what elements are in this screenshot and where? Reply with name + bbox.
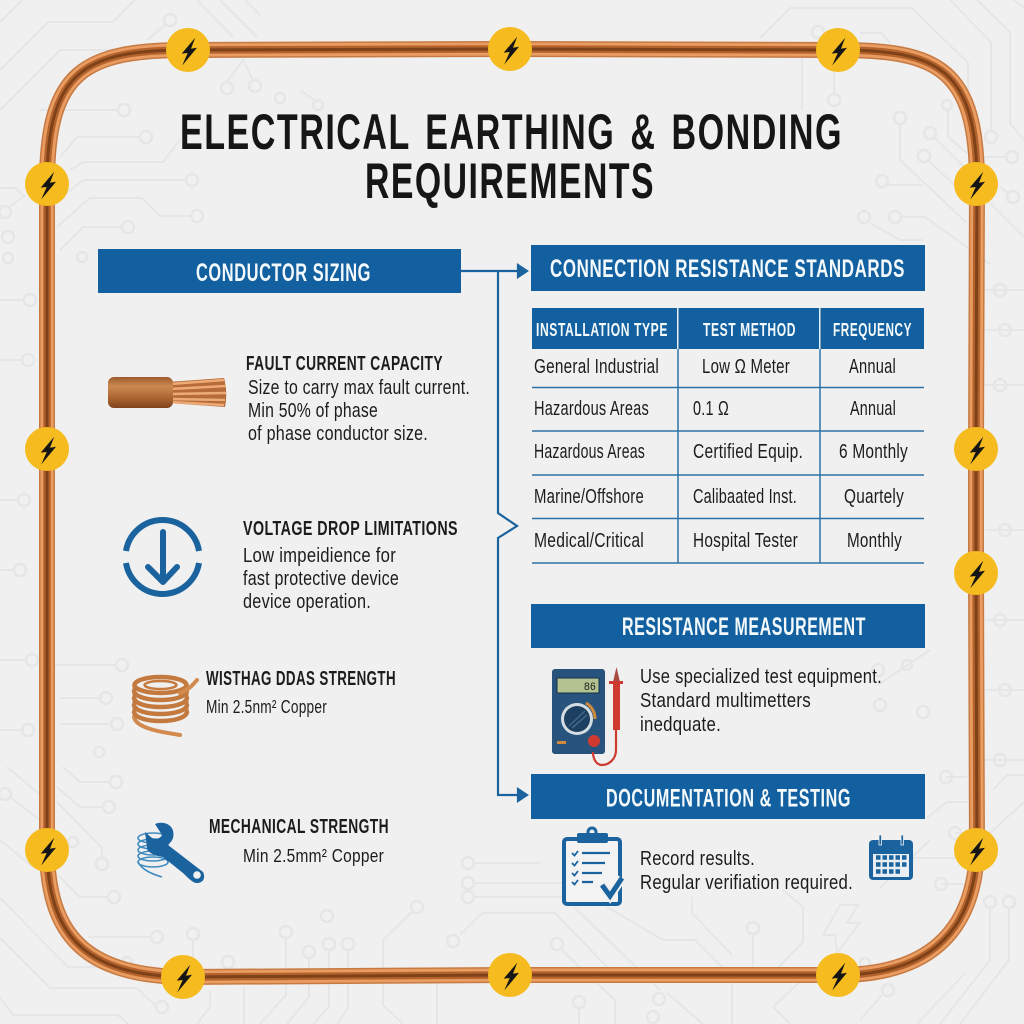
- table: resistance standards: [532, 308, 924, 563]
- table header: INSTALLATION TYPE: [536, 319, 668, 340]
- table row: hazardous areas second: Certified Equip.: [693, 441, 803, 463]
- table row: medical critical: [534, 530, 902, 552]
- text: measurement note: inedquate.: [640, 713, 721, 736]
- table row: hazardous areas: 0.1 Ω: [693, 398, 729, 420]
- table row: general industrial: Annual: [849, 356, 896, 378]
- text: wisthag ddas strength: [206, 668, 396, 717]
- table row: medical critical: Medical/Critical: [534, 530, 644, 552]
- icon: wrench and coil: [138, 823, 204, 883]
- table row: medical critical: Hospital Tester: [693, 530, 798, 552]
- panel: connection resistance standards: [531, 245, 925, 563]
- heading: connection resistance standards: [531, 245, 925, 291]
- icon: clipboard checklist: [564, 828, 622, 904]
- table header: FREQUENCY: [833, 319, 912, 340]
- text: voltage drop limitations: device operation.: [243, 591, 371, 613]
- panel: resistance measurement: [531, 604, 925, 765]
- text: measurement note: Use specialized test equipment.: [640, 665, 882, 688]
- connector arrows: [461, 265, 527, 801]
- text: fault current capacity: of phase conductor size.: [248, 423, 428, 445]
- table row: hazardous areas second: [534, 441, 908, 463]
- table row: general industrial: General Industrial: [534, 356, 659, 378]
- heading: conductor sizing: CONDUCTOR SIZING: [196, 259, 371, 287]
- icon: multimeter: [552, 667, 623, 765]
- table row: marine offshore: Calibaated Inst.: [693, 486, 797, 508]
- table row: marine offshore: Quartely: [844, 486, 904, 508]
- title: [180, 104, 843, 209]
- text: wisthag ddas strength: Min 2.5nm² Copper: [206, 696, 327, 717]
- icon: calendar: [869, 835, 913, 880]
- text: measurement note: Standard multimetters: [640, 689, 811, 712]
- text: fault current capacity: [246, 353, 470, 445]
- text: mechanical strength: [209, 816, 389, 866]
- heading: documentation and testing: [531, 774, 925, 819]
- text: measurement note: [640, 665, 882, 736]
- text: wisthag ddas strength: WISTHAG DDAS STRENGTH: [206, 668, 396, 690]
- table row: general industrial: Low Ω Meter: [702, 356, 790, 378]
- text: voltage drop limitations: VOLTAGE DROP LIMITATIONS: [243, 518, 458, 540]
- table row: hazardous areas: Annual: [850, 398, 896, 420]
- icon: voltage drop arrow: [126, 520, 199, 594]
- icon: copper coil: [134, 677, 197, 735]
- table row: hazardous areas: Hazardous Areas: [534, 398, 649, 420]
- heading: documentation and testing: DOCUMENTATION & TESTING: [606, 784, 851, 812]
- icon: multimeter: 86: [584, 681, 596, 693]
- text: voltage drop limitations: Low impeidience for: [243, 545, 396, 567]
- text: voltage drop limitations: fast protective device: [243, 568, 399, 590]
- table row: general industrial: [534, 356, 896, 378]
- table header: [532, 308, 924, 349]
- title: REQUIREMENTS: [365, 153, 655, 209]
- panel: conductor sizing: [98, 249, 470, 883]
- heading: resistance measurement: [531, 604, 925, 648]
- text: fault current capacity: FAULT CURRENT CAPACITY: [246, 353, 443, 375]
- panel: documentation and testing: [531, 774, 925, 904]
- text: mechanical strength: Min 2.5mm² Copper: [243, 845, 384, 866]
- text: mechanical strength: MECHANICAL STRENGTH: [209, 816, 389, 838]
- text: fault current capacity: Min 50% of phase: [248, 400, 378, 422]
- table row: marine offshore: Marine/Offshore: [534, 486, 644, 508]
- table row: hazardous areas second: 6 Monthly: [839, 441, 908, 463]
- table row: medical critical: Monthly: [847, 530, 902, 552]
- table row: hazardous areas second: Hazardous Areas: [534, 441, 645, 463]
- icon: copper cable: [108, 377, 226, 408]
- text: fault current capacity: Size to carry max fault current.: [248, 377, 470, 399]
- text: documentation note: Record results.: [640, 847, 755, 870]
- text: documentation note: Regular verifiation required.: [640, 871, 853, 894]
- heading: conductor sizing: [98, 249, 461, 293]
- text: documentation note: [640, 847, 853, 894]
- table row: hazardous areas: [534, 398, 896, 420]
- table row: marine offshore: [534, 486, 904, 508]
- table header: TEST METHOD: [703, 319, 796, 340]
- heading: resistance measurement: RESISTANCE MEASUREMENT: [622, 613, 866, 641]
- text: voltage drop limitations: [243, 518, 458, 613]
